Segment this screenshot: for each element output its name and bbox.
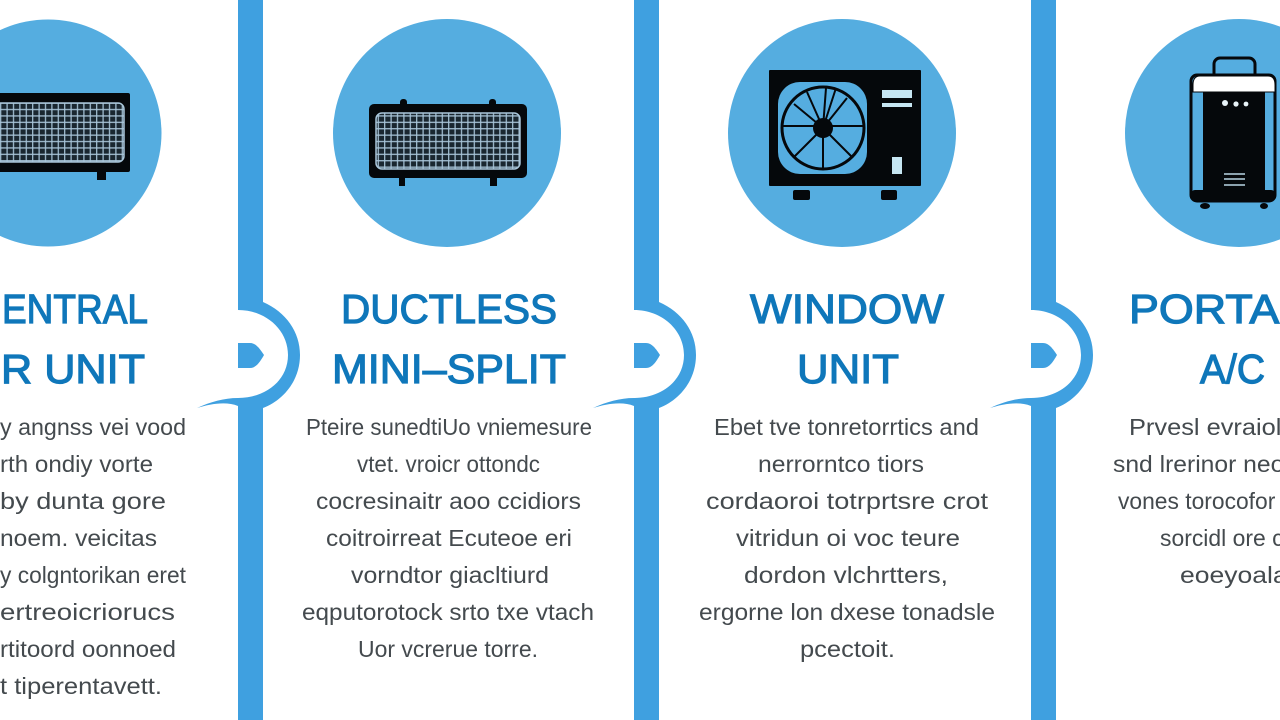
text block: ductless mini-split description: coitroirreat Ecuteoe eri: [326, 525, 572, 551]
text block: ductless mini-split description: Uor vcrerue torre.: [358, 636, 538, 662]
text block: central air unit description: ertreoicriorucs: [0, 599, 175, 625]
heading: portable A/C: A/C: [1200, 346, 1265, 392]
icon: central air unit: [0, 20, 162, 246]
text block: ductless mini-split description: [302, 414, 594, 662]
heading: central air unit: [1, 286, 148, 392]
text block: central air unit description: noem. veicitas: [0, 525, 157, 551]
text block: central air unit description: y angnss vei vood: [0, 414, 186, 440]
icon: ductless mini-split: [333, 19, 561, 247]
panel: window unit: [699, 19, 995, 662]
heading: portable A/C: [1129, 286, 1280, 392]
text block: window unit description: dordon vlchrtters,: [744, 562, 948, 588]
icon: window unit: [728, 19, 956, 247]
text block: ductless mini-split description: Pteire sunedtiUo vniemesure: [306, 414, 592, 440]
heading: window unit: UNIT: [797, 346, 899, 392]
text block: window unit description: cordaoroi totrprtsre crot: [706, 488, 989, 514]
panel: central air unit: [0, 20, 186, 699]
text block: central air unit description: by dunta gore: [0, 488, 166, 514]
text block: central air unit description: [0, 414, 186, 699]
text block: central air unit description: t tiperentavett.: [0, 673, 162, 699]
text block: central air unit description: y colgntorikan eret: [0, 562, 186, 588]
panel: portable A/C: [1113, 19, 1280, 588]
text block: ductless mini-split description: eqputorotock srto txe vtach: [302, 599, 594, 625]
text block: ductless mini-split description: cocresinaitr aoo ccidiors: [316, 488, 581, 514]
text block: window unit description: [699, 414, 995, 662]
heading: window unit: WINDOW: [750, 286, 944, 332]
heading: window unit: [750, 286, 944, 392]
text block: central air unit description: rth ondiy vorte: [0, 451, 153, 477]
text block: window unit description: Ebet tve tonretorrtics and: [714, 414, 979, 440]
text block: ductless mini-split description: vorndtor giacltiurd: [351, 562, 549, 588]
heading: central air unit: R UNIT: [1, 346, 145, 392]
text block: central air unit description: rtitoord oonnoed: [0, 636, 176, 662]
text block: ductless mini-split description: vtet. vroicr ottondc: [357, 451, 540, 477]
heading: ductless mini-split: DUCTLESS: [341, 286, 557, 332]
heading: ductless mini-split: [332, 286, 566, 392]
text block: portable A/C description: [1113, 414, 1280, 588]
divider: third blue bar with tab: [990, 0, 1093, 720]
divider: first blue bar with tab: [197, 0, 300, 720]
heading: central air unit: ENTRAL: [2, 286, 148, 332]
divider: second blue bar with tab: [593, 0, 696, 720]
text block: window unit description: vitridun oi voc teure: [736, 525, 960, 551]
heading: ductless mini-split: MINI–SPLIT: [332, 346, 566, 392]
text block: window unit description: nerrorntco tiors: [758, 451, 924, 477]
text block: window unit description: pcectoit.: [800, 636, 895, 662]
icon: portable A/C: [1125, 19, 1280, 247]
text block: portable A/C description: eoeyoalat: [1180, 562, 1280, 588]
panel: ductless mini-split: [302, 19, 594, 662]
text block: window unit description: ergorne lon dxese tonadsle: [699, 599, 995, 625]
